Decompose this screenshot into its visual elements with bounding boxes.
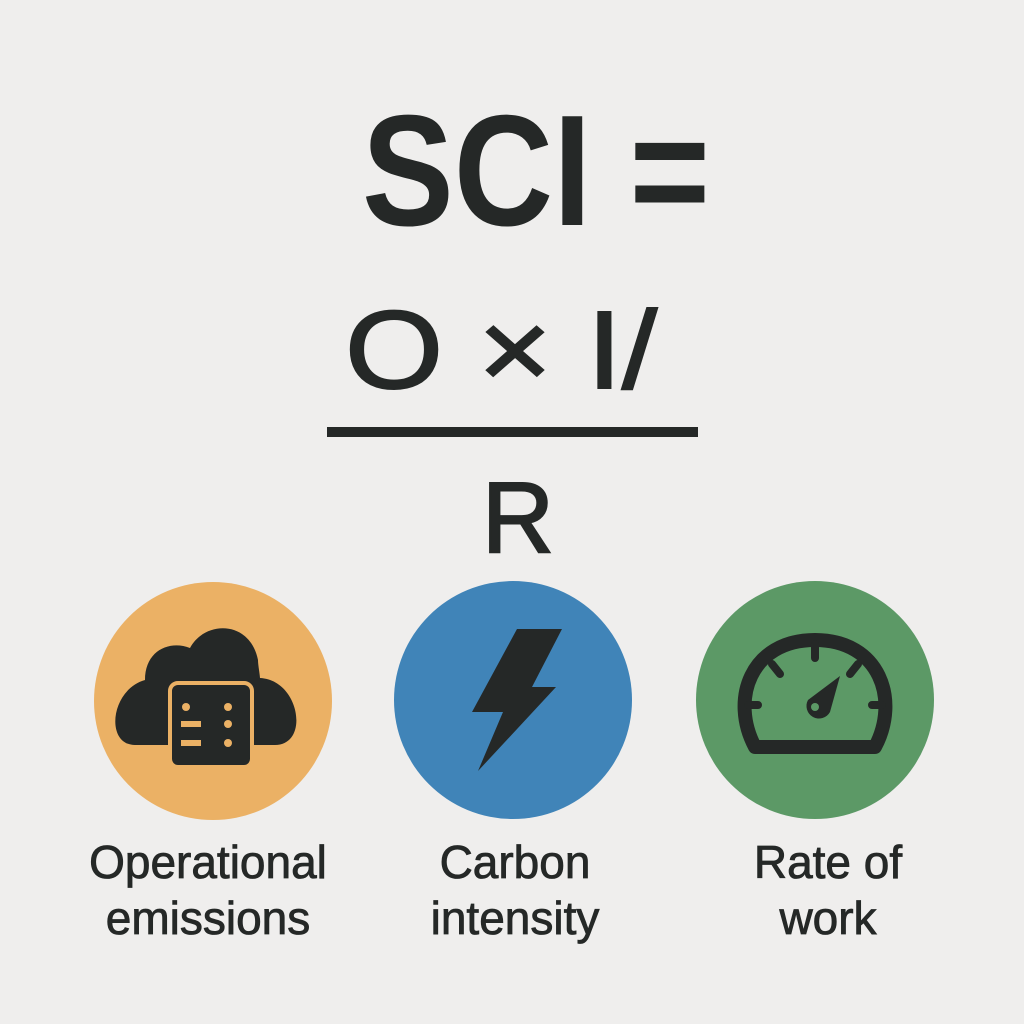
label: operational emissions: Operational [89, 836, 327, 888]
icon: rate of work speedometer [696, 581, 934, 819]
fraction bar [327, 427, 698, 437]
label: carbon intensity: Carbon [440, 836, 590, 888]
label: operational emissions: emissions [106, 892, 310, 944]
icon: carbon intensity lightning bolt [394, 581, 632, 819]
label: rate of work: work [778, 892, 878, 944]
label: carbon intensity: intensity [431, 892, 599, 944]
label: rate of work: Rate of [754, 836, 902, 888]
icon: operational emissions cloud server [94, 582, 332, 820]
title: SCI =: SCI = [362, 83, 710, 259]
formula denominator: R [482, 462, 554, 574]
formula numerator: O × I/ [345, 289, 658, 412]
